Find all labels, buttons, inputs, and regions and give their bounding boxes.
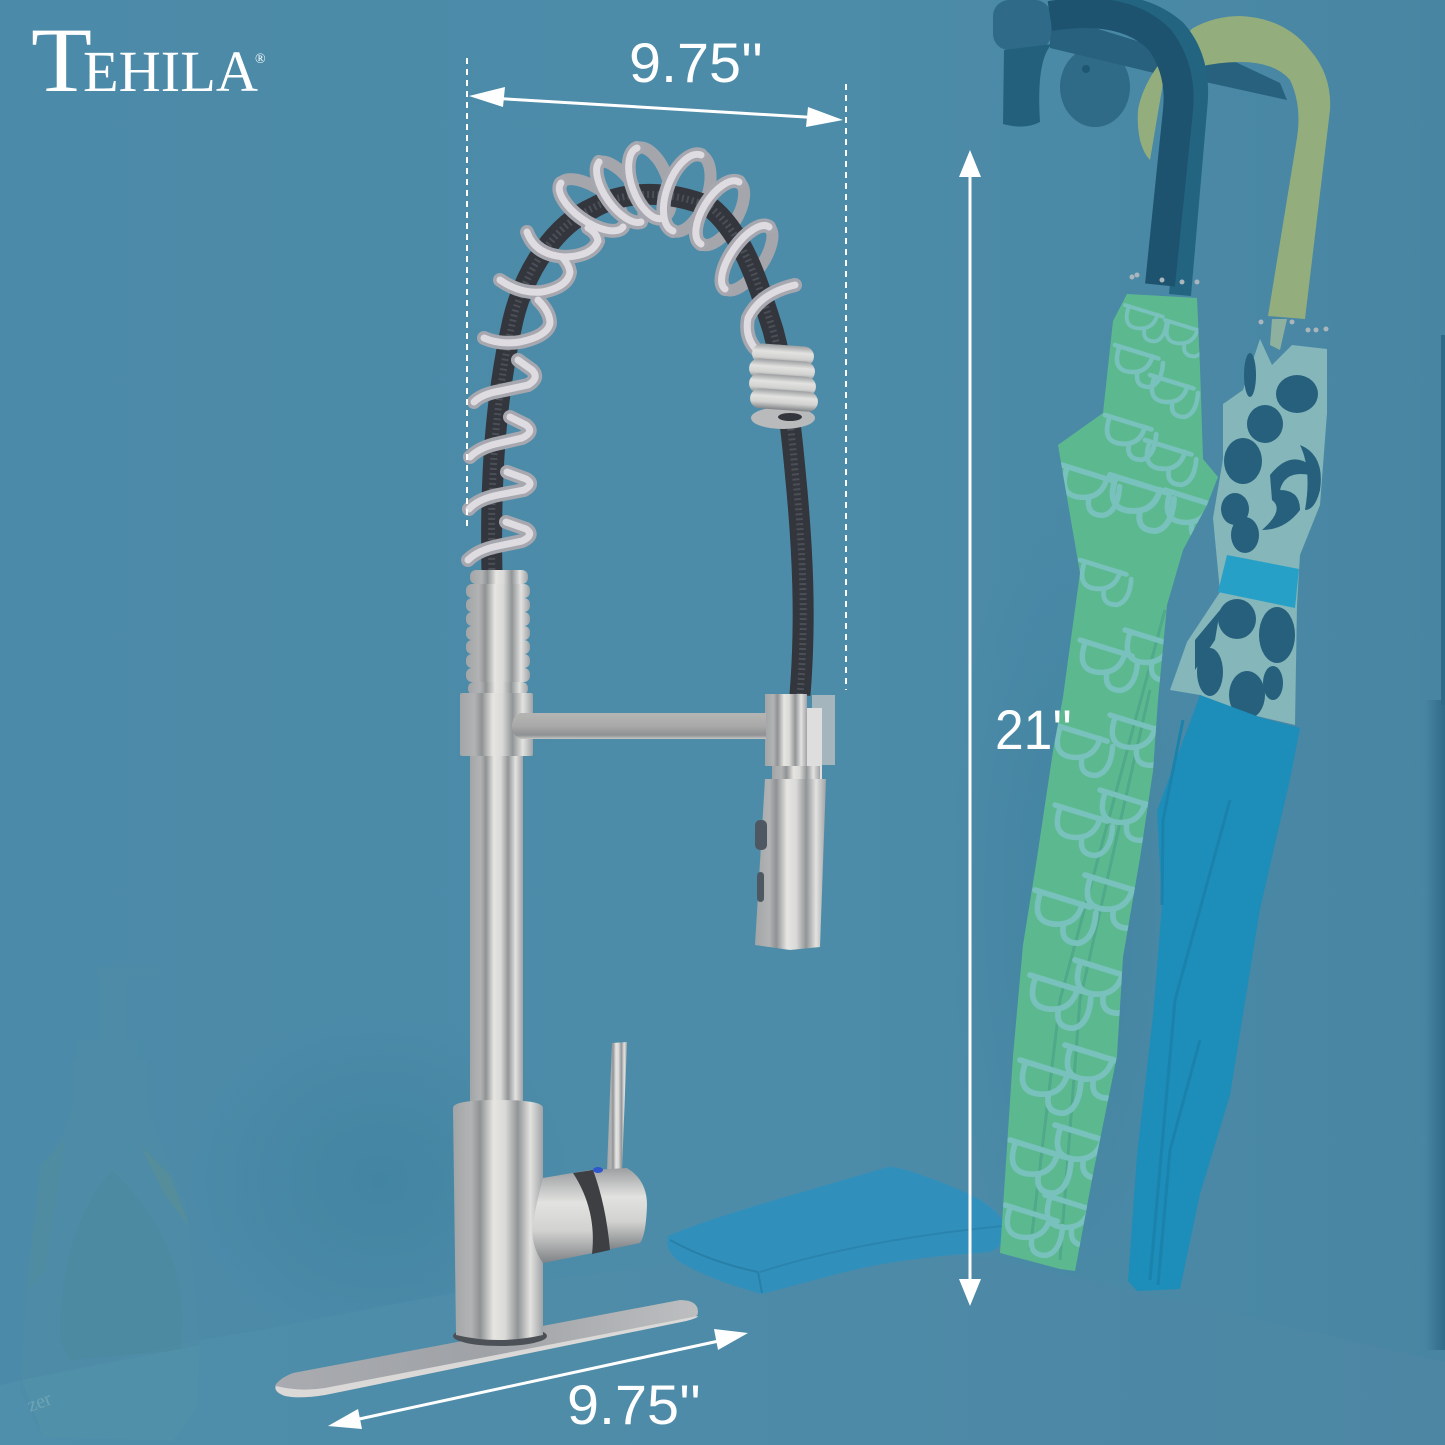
- logo: Tehila: [31, 9, 266, 111]
- lower spring stack: [466, 570, 530, 695]
- wall shadow near faucet: [190, 1010, 570, 1350]
- pipe knob: [993, 0, 1051, 50]
- logo: Tehila: T: [31, 9, 92, 111]
- handle band: [573, 1170, 610, 1254]
- green umbrella: [1000, 294, 1223, 1271]
- spray head: [755, 779, 826, 950]
- label: top width: 9.75'': [629, 31, 763, 94]
- neck: [772, 766, 820, 780]
- label: height: 21'': [995, 698, 1072, 761]
- towel: [667, 1167, 1004, 1294]
- green handle stem: [1270, 319, 1287, 350]
- label: base width: 9.75'': [567, 1373, 701, 1436]
- collar left: [460, 693, 533, 756]
- logo: Tehila: ®: [255, 52, 266, 67]
- spray buttons: [755, 820, 767, 850]
- blue indicator: [593, 1167, 603, 1173]
- umbrella rib tips: [1130, 272, 1328, 332]
- soap label text: zer: [24, 1388, 55, 1417]
- fold shadow: [1030, 610, 1165, 1260]
- faucet: [275, 147, 835, 1397]
- handle stem: [532, 1170, 602, 1263]
- pull-down hose: [492, 194, 803, 695]
- coil back strands: [561, 147, 772, 290]
- rail pipe: [1050, 14, 1287, 100]
- soap dispenser: [20, 967, 200, 1441]
- deck plate: [275, 1300, 698, 1397]
- base width dimension: [328, 1329, 748, 1436]
- base ring: [453, 1326, 547, 1346]
- blue umbrella: [1128, 695, 1300, 1291]
- lower body: [453, 1100, 543, 1340]
- upper right coil stack: [748, 343, 819, 429]
- logo: Tehila: EHILA: [83, 39, 258, 104]
- spring coil: [468, 148, 795, 560]
- dock clip: [812, 695, 835, 765]
- umbrella strap: [1218, 555, 1299, 608]
- elbow: [1003, 44, 1052, 127]
- hook rail: [993, 0, 1287, 127]
- handle cap: [593, 1168, 647, 1250]
- height dimension: [959, 150, 1072, 1306]
- dock right: [807, 708, 822, 780]
- width dimension top: [467, 31, 846, 690]
- main riser: [470, 750, 523, 1110]
- wall corner shade: [1425, 335, 1445, 1350]
- countertop: [0, 1255, 1445, 1445]
- spring coil highlight: [468, 148, 795, 560]
- wall flange: [1060, 47, 1130, 127]
- polka dot umbrella: [1170, 339, 1327, 725]
- wall shadow near umbrellas: [950, 480, 1190, 1320]
- lever: [607, 1042, 627, 1170]
- green umbrella handle: [1138, 16, 1330, 350]
- dark umbrella handle: [1050, 7, 1197, 295]
- spout arm: [512, 713, 766, 739]
- letter pattern: [1005, 305, 1223, 1255]
